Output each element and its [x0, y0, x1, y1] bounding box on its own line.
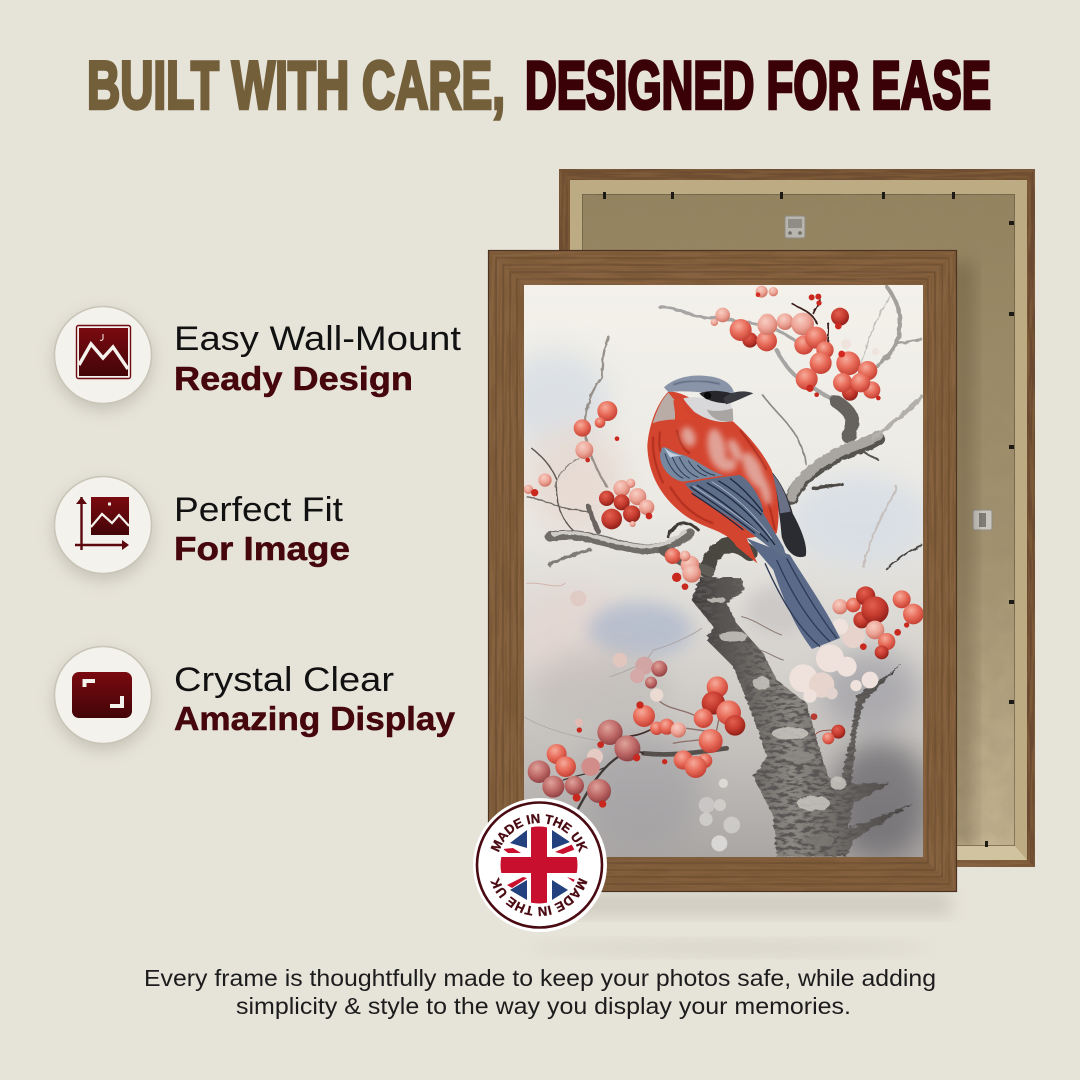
- hanger: top: [785, 216, 805, 238]
- footer text: simplicity & style to the way you display your memories.: [236, 993, 851, 1019]
- label: perfect fit: [174, 491, 350, 567]
- red neck patch: [673, 400, 675, 412]
- front wood frame: [488, 250, 957, 892]
- grey neck: [653, 393, 675, 423]
- red plumage strokes: [653, 430, 775, 530]
- label: perfect fit: Perfect Fit: [174, 491, 344, 529]
- back of frame: [559, 169, 1035, 867]
- label: easy wall-mount: Ready Design: [174, 360, 413, 397]
- berries: lower clusters: [528, 564, 924, 808]
- tan inner lip: [570, 180, 1027, 860]
- painting: bird on berry branch: [500, 285, 930, 860]
- icon: full-screen display: [72, 672, 132, 718]
- left rail: [488, 250, 524, 892]
- icon: framed mountain picture with hook: [76, 326, 130, 378]
- title: BUILT WITH CARE,: [87, 48, 505, 124]
- blossoms: [699, 619, 878, 851]
- footer text: [144, 965, 936, 1019]
- badge text: MADE IN THE UK: [490, 877, 588, 916]
- hanger: side: [973, 510, 992, 530]
- main blue wing: [685, 475, 787, 557]
- head cap: [664, 376, 734, 394]
- trunk: [692, 577, 913, 857]
- upper blue wing: [660, 447, 724, 482]
- bottom lip: [570, 846, 1027, 860]
- white face: [683, 397, 733, 422]
- beak: [723, 391, 753, 404]
- feature: easy wall-mount: [54, 306, 462, 410]
- dark wing tip: [770, 470, 806, 557]
- watercolour wash: [500, 350, 930, 860]
- kraft backing board: [582, 194, 1015, 846]
- label: easy wall-mount: Easy Wall-Mount: [174, 320, 462, 358]
- made in the uk badge: [473, 798, 607, 932]
- eye mask: [699, 391, 734, 403]
- label: crystal clear: Amazing Display: [174, 700, 456, 737]
- feature: crystal clear: [54, 646, 456, 750]
- top rail: [488, 250, 957, 285]
- label: easy wall-mount: [174, 320, 462, 397]
- footer text: Every frame is thoughtfully made to keep your photos safe, while adding: [144, 965, 936, 991]
- union flag: [500, 826, 578, 904]
- title: [87, 48, 991, 124]
- upper branches: [527, 287, 922, 572]
- rail ridges and knots: [496, 258, 949, 884]
- wood frame back: [559, 169, 1035, 867]
- berries: upper clusters: [524, 286, 881, 574]
- right rail: [923, 250, 957, 892]
- label: crystal clear: Crystal Clear: [174, 661, 394, 699]
- frame shadow: [520, 262, 974, 955]
- badge text: [490, 814, 588, 916]
- bottom rail: [488, 857, 957, 892]
- feature: perfect fit: [54, 476, 350, 580]
- badge disc: [473, 798, 607, 932]
- red body: [647, 392, 779, 563]
- pink plumage highlights: [679, 425, 773, 506]
- icon: picture with dimension arrows: [75, 497, 129, 550]
- bird: [647, 376, 840, 649]
- label: perfect fit: For Image: [174, 530, 350, 567]
- fixing clips: [603, 192, 1014, 847]
- lower twigs: [523, 583, 837, 808]
- label: crystal clear: [174, 661, 456, 737]
- tail: [747, 538, 840, 649]
- eye: [704, 392, 711, 399]
- badge text: MADE IN THE UK: [490, 814, 588, 853]
